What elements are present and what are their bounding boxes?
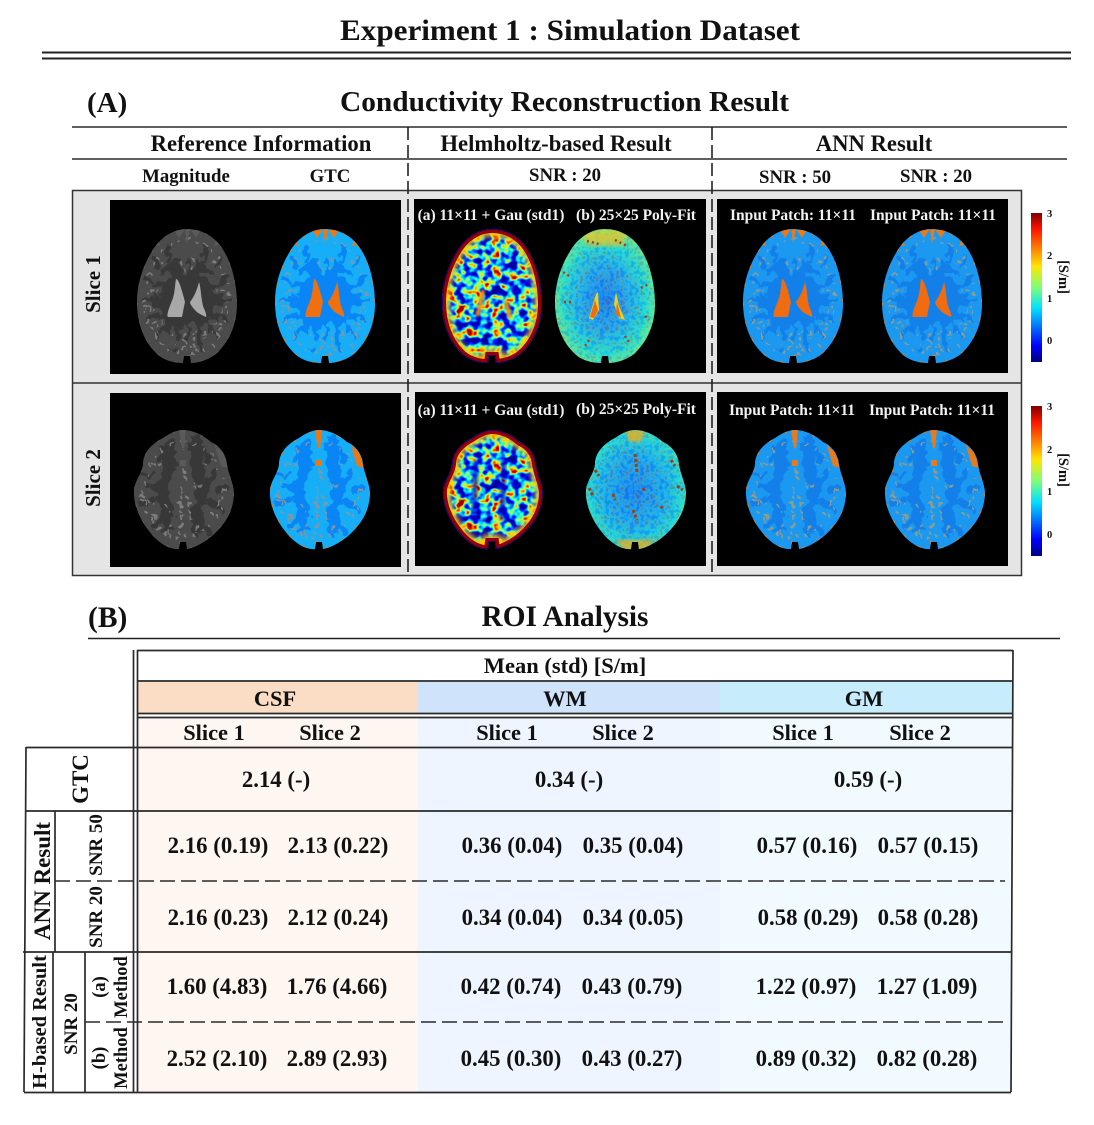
slice 2 image captions: Input Patch: 11×11	[729, 402, 855, 419]
row labels rotated: H-based Result	[29, 955, 51, 1089]
slice headers: Slice 1	[476, 720, 538, 745]
tissue headers: CSF	[254, 686, 296, 711]
row labels rotated: SNR 50	[86, 814, 107, 876]
slice 2 ANN images	[717, 392, 1008, 566]
column header: Helmholtz result: Helmholtz-based Result	[440, 131, 672, 156]
row labels rotated: (b)	[90, 1047, 110, 1069]
row: ANN SNR 20 values: 0.58 (0.28)	[878, 905, 978, 930]
slice 1 image captions: Input Patch: 11×11	[730, 207, 856, 224]
row: method b values: 0.45 (0.30)	[461, 1046, 561, 1071]
brain: magnitude slice 2	[134, 430, 234, 549]
panel B heading: ROI Analysis	[482, 601, 648, 633]
row: method a values: 0.42 (0.74)	[461, 974, 561, 999]
brain: ANN SNR 50 slice 2	[746, 430, 846, 549]
brain: ANN SNR 20 slice 2	[885, 430, 985, 549]
row: ANN SNR 50 values: 2.13 (0.22)	[288, 833, 388, 858]
row labels rotated: ANN Result	[30, 822, 55, 940]
tissue band: CSF	[137, 682, 418, 713]
row: ANN SNR 50 values: 0.57 (0.15)	[878, 833, 978, 858]
colorbar slice 2: 0	[1047, 530, 1052, 541]
colorbar slice 2: [S/m]	[1055, 453, 1071, 487]
row: ANN SNR 20 values: 0.34 (0.04)	[462, 905, 562, 930]
panel B: ROI table	[23, 650, 1013, 1092]
slice headers: Slice 1	[772, 720, 834, 745]
table grid lines	[23, 650, 1013, 1092]
colorbar slice 1: 3	[1047, 209, 1052, 220]
slice 1 image captions: (b) 25×25 Poly-Fit	[576, 207, 697, 224]
sub headers	[142, 165, 972, 188]
row label: slice 1: Slice 1	[81, 255, 105, 313]
row: method b values: 2.52 (2.10)	[167, 1046, 267, 1071]
panel B heading label: (B)	[88, 602, 127, 634]
sub headers: GTC	[310, 166, 350, 187]
table tinted columns	[137, 717, 1012, 1092]
sub headers: SNR : 20	[900, 166, 972, 187]
tissue band: GM	[720, 682, 1013, 713]
table header: mean std: Mean (std) [S/m]	[484, 653, 646, 678]
column header: reference information: Reference Information	[151, 131, 372, 156]
colorbar slice 1: [S/m]	[1055, 260, 1071, 294]
tissue headers: GM	[845, 686, 883, 711]
slice 2 image captions: (b) 25×25 Poly-Fit	[576, 401, 697, 418]
row: GTC values	[242, 767, 902, 792]
tissue headers	[254, 686, 883, 711]
gray image panel	[72, 190, 1022, 576]
brain: method a slice 2	[440, 428, 544, 552]
slice 2 reference images	[110, 393, 401, 567]
row: method a values: 1.27 (1.09)	[877, 974, 977, 999]
row: method a values	[167, 974, 977, 999]
panel A: conductivity reconstruction	[72, 127, 1067, 576]
slice 2 Helmholtz images	[415, 392, 706, 566]
row labels rotated: Method	[112, 955, 132, 1018]
slice headers	[183, 720, 951, 745]
slice 1 reference images	[110, 200, 401, 374]
slice 1 Helmholtz images	[414, 199, 706, 373]
brain: method b slice 2	[583, 428, 687, 552]
row: ANN SNR 20 values	[168, 905, 978, 930]
colorbar slice 2: 2	[1047, 445, 1052, 456]
row labels rotated	[29, 754, 132, 1089]
slice 1 ANN images	[717, 199, 1008, 373]
slice 1 image captions: Input Patch: 11×11	[870, 207, 996, 224]
sub headers: SNR : 20	[529, 165, 601, 186]
brain: method a slice 1	[440, 227, 544, 365]
panel A heading label: (A)	[87, 87, 127, 119]
column header: ANN result: ANN Result	[816, 131, 933, 156]
row: ANN SNR 20 values: 0.58 (0.29)	[758, 905, 858, 930]
row: ANN SNR 20 values: 2.12 (0.24)	[288, 905, 388, 930]
slice 1 image captions: (a) 11×11 + Gau (std1)	[418, 207, 564, 224]
tissue headers: WM	[543, 686, 587, 711]
row: ANN SNR 50 values: 2.16 (0.19)	[168, 833, 268, 858]
brain: GTC slice 1	[275, 229, 375, 363]
slice 1 image captions	[418, 207, 996, 224]
row labels rotated: Method	[112, 1026, 132, 1089]
panel A heading: Conductivity Reconstruction Result	[340, 87, 790, 118]
row: method a values: 1.22 (0.97)	[756, 974, 856, 999]
colorbar slice 2: 1	[1047, 487, 1052, 498]
row: ANN SNR 50 values: 0.35 (0.04)	[583, 833, 683, 858]
colorbar slice 1: 2	[1047, 251, 1052, 262]
row labels rotated: SNR 20	[61, 993, 82, 1055]
row labels rotated: (a)	[90, 976, 110, 998]
row: method b values	[167, 1046, 977, 1071]
colorbar slice 1: 1	[1047, 294, 1052, 305]
colorbar slice 2: 3	[1047, 402, 1052, 413]
row: ANN SNR 50 values: 0.57 (0.16)	[757, 833, 857, 858]
sub headers: SNR : 50	[759, 167, 831, 188]
row: method a values: 1.60 (4.83)	[167, 974, 267, 999]
slice 2 image captions: Input Patch: 11×11	[869, 402, 995, 419]
row: method b values: 0.82 (0.28)	[877, 1046, 977, 1071]
brain: ANN SNR 50 slice 1	[743, 229, 843, 363]
sub headers: Magnitude	[142, 166, 230, 187]
slice 2 image captions: (a) 11×11 + Gau (std1)	[418, 402, 564, 419]
row: ANN SNR 20 values: 2.16 (0.23)	[168, 905, 268, 930]
brain: GTC slice 2	[270, 430, 370, 549]
row labels rotated: SNR 20	[86, 886, 107, 948]
row: ANN SNR 20 values: 0.34 (0.05)	[583, 905, 683, 930]
brain: method b slice 1	[553, 227, 657, 365]
slice headers: Slice 2	[299, 720, 361, 745]
row: method b values: 0.43 (0.27)	[582, 1046, 682, 1071]
slice headers: Slice 1	[183, 720, 245, 745]
slice 2 image captions	[418, 401, 995, 419]
colorbar slice 2	[1031, 402, 1071, 556]
row: method b values: 0.89 (0.32)	[756, 1046, 856, 1071]
brain: ANN SNR 20 slice 1	[882, 229, 982, 363]
tissue band: WM	[418, 682, 720, 713]
row label: slice 2: Slice 2	[81, 449, 105, 507]
slice headers: Slice 2	[592, 720, 654, 745]
slice headers: Slice 2	[889, 720, 951, 745]
colorbar slice 1: 0	[1047, 336, 1052, 347]
title: Experiment 1 : Simulation Dataset	[340, 15, 800, 47]
row: GTC values: 0.59 (-)	[834, 767, 902, 792]
row: method a values: 1.76 (4.66)	[287, 974, 387, 999]
row: GTC values: 0.34 (-)	[535, 767, 603, 792]
row: GTC values: 2.14 (-)	[242, 767, 310, 792]
row: ANN SNR 50 values: 0.36 (0.04)	[462, 833, 562, 858]
row labels rotated: GTC	[68, 754, 93, 804]
brain: magnitude slice 1	[137, 229, 237, 363]
row: method b values: 2.89 (2.93)	[287, 1046, 387, 1071]
row: method a values: 0.43 (0.79)	[582, 974, 682, 999]
colorbar slice 1	[1031, 209, 1071, 362]
row: ANN SNR 50 values	[168, 833, 978, 858]
